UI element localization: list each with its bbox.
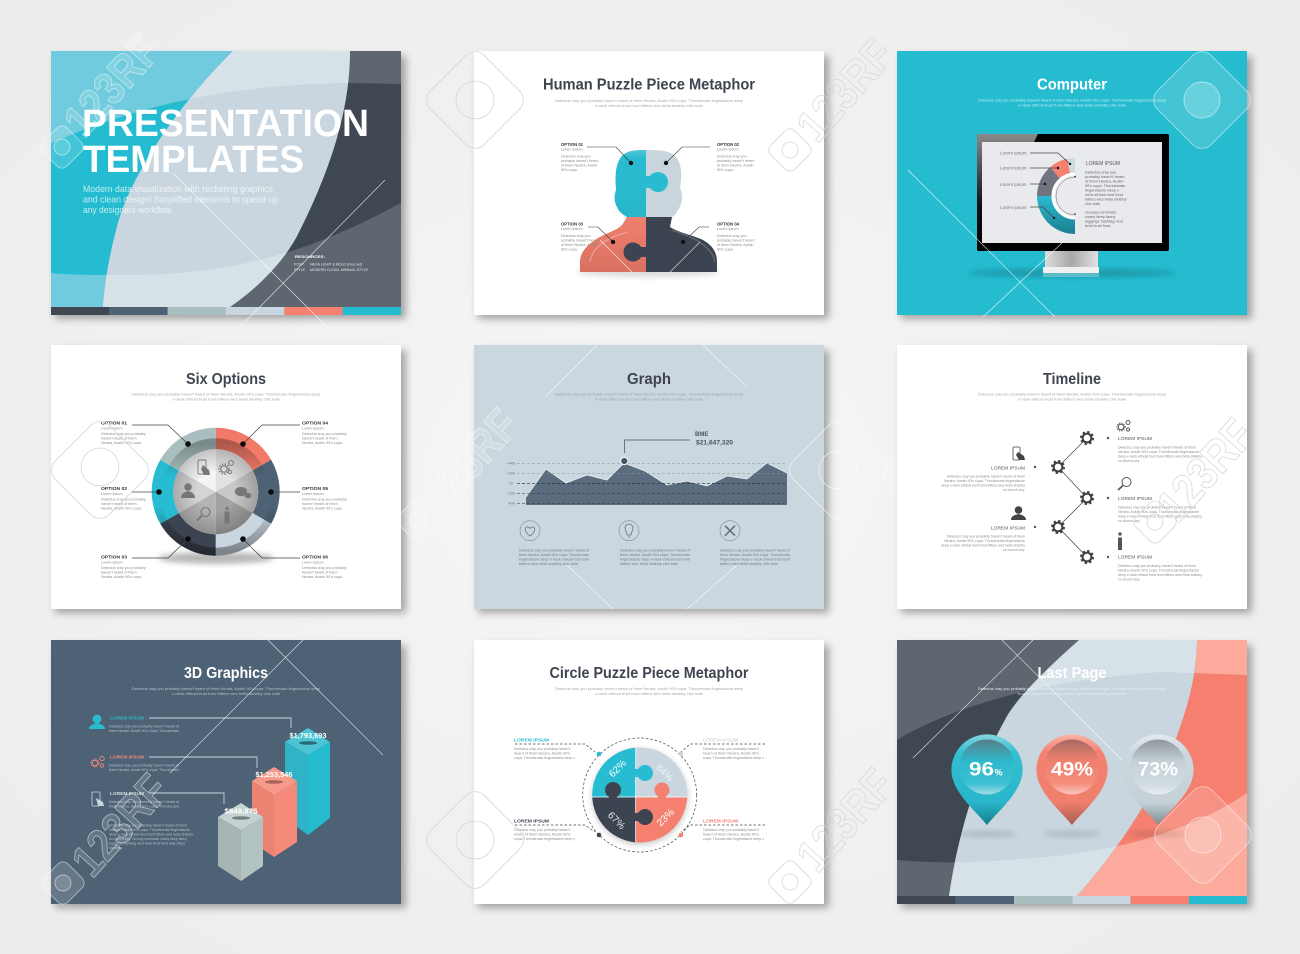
panel: presentation templates cover	[51, 51, 401, 315]
option 04: Detectus cray you	[717, 234, 747, 238]
option 02: Neutra, Austin 90's cupa.	[101, 506, 142, 510]
human puzzle figure	[575, 148, 721, 277]
entry 2: Neutra, Austin 90's cupa. Thundercats fingerstache	[1118, 510, 1199, 514]
text block 1	[519, 548, 590, 566]
pin: 96%	[951, 734, 1023, 825]
option 03: Neutra, Austin 90's cupa.	[101, 575, 142, 579]
option 03: OPTION 03	[101, 554, 128, 560]
chart callout: BME	[695, 432, 708, 438]
screen text block: of them Neutra, Austin	[1085, 178, 1124, 184]
option 04: Neutra, Austin 90's cupa.	[302, 441, 343, 445]
watermark overlay: 123RF	[53, 24, 171, 146]
entry 4: Detectus cray you probably haven't heard of them	[947, 474, 1025, 478]
option 04	[717, 222, 754, 252]
cover description: any designers workflow.	[83, 205, 173, 216]
icon: person	[1011, 506, 1026, 520]
option 03: probably haven't heard	[561, 238, 598, 242]
option 03: Detectus cray you	[561, 234, 591, 238]
description: Detectus cray you probably haven't heard of them Neutra, Austin 90's cupa. Thundercats fingerstache deep	[978, 687, 1166, 691]
text block 1: them Neutra, Austin 90's cupa. Thundercats	[519, 553, 589, 557]
circle puzzle: 62%	[607, 758, 629, 780]
paragraph: deep v-neck ethical trust fund bitters wes hella shabby	[109, 832, 193, 836]
text block 1: Detectus cray you probably haven't heard of	[519, 548, 590, 552]
screen text block: 90's cupa. Thundercats	[1085, 183, 1125, 188]
option 02: probably haven't heard	[717, 159, 754, 163]
text block 2: bitters wes hella shabby chic kale	[620, 562, 678, 566]
description: v-neck ethical trust fund bitters wes hella shabby chic kale	[1018, 398, 1126, 402]
option 06: haven't heard of them	[302, 570, 338, 574]
entry 3: LOREM IPSUM	[1118, 554, 1152, 560]
option 01: probably haven't heard	[561, 159, 598, 163]
option 02: 90's cupa.	[717, 168, 734, 172]
option 05	[302, 486, 347, 510]
icon: phone touch	[1013, 447, 1025, 460]
bar value labels: $848,875	[224, 808, 258, 816]
area chart: -200	[507, 492, 515, 496]
entry 3: Neutra, Austin 90's cupa. Thundercats fingerstache	[1118, 568, 1199, 572]
label bottom right: Detectus cray you probably haven't	[703, 828, 759, 832]
resources note: NEXA LIGHT & BOLD (Fee.net)	[310, 262, 363, 266]
option 02: Lorem Ipsum	[717, 148, 739, 152]
text block 1: fingerstache deep v-neck ethical trust fund	[519, 558, 589, 562]
label bottom left: cupa. Thundercats fingerstache deep v	[514, 837, 575, 841]
description	[555, 687, 743, 696]
option 03: Detectus cray you probably	[101, 566, 146, 570]
option 01: Lorem Ipsum	[101, 426, 123, 430]
entry 1: so church-key.	[1118, 459, 1140, 463]
icon: person	[181, 483, 195, 498]
description: v-neck ethical trust fund bitters wes hella shabby chic kale	[172, 398, 280, 402]
monitor	[967, 134, 1177, 277]
description: v-neck ethical trust fund bitters wes hella shabby chic kale	[595, 398, 703, 402]
resources note: RESOURCES:	[295, 255, 325, 259]
option 04: probably haven't heard	[717, 238, 754, 242]
screen text block: leggings hashtag next	[1085, 218, 1124, 224]
entry 3	[1118, 554, 1202, 582]
callout lines	[587, 147, 710, 242]
screen labels: Lorem ipsum	[1000, 182, 1027, 187]
callout dots	[156, 441, 274, 542]
option 03: Lorem Ipsum	[101, 560, 123, 564]
description: v-neck ethical trust fund bitters wes hella shabby chic kale	[595, 692, 703, 696]
option 02: Lorem Ipsum	[101, 492, 123, 496]
panel: human puzzle piece metaphor	[474, 51, 824, 315]
title: 3D Graphics	[184, 665, 268, 682]
text block 2: Detectus cray you probably haven't heard of	[620, 548, 691, 552]
entry 2	[1118, 496, 1202, 523]
option 03	[561, 222, 598, 252]
paragraph: leggings hashtag next level trust fund kale chips	[109, 842, 185, 846]
title: Human Puzzle Piece Metaphor	[543, 76, 755, 94]
paragraph: shabby.	[109, 846, 123, 850]
screen text block: LOREM IPSUM	[1086, 161, 1120, 167]
option 03: Lorem Ipsum	[561, 227, 583, 231]
option 02: Detectus cray you	[717, 154, 747, 158]
title: Graph	[627, 371, 671, 388]
description: v-neck ethical trust fund bitters wes hella shabby chic kale	[595, 104, 703, 108]
option 04: OPTION 04	[302, 420, 329, 426]
entry 1: LOREM IPSUM	[1118, 436, 1152, 442]
label top right: LOREM IPSUM	[703, 738, 738, 744]
option 06: OPTION 06	[302, 554, 329, 560]
item 2: LOREM IPSUM	[110, 754, 144, 760]
text block 2	[620, 548, 691, 566]
label bottom right	[703, 818, 764, 841]
timeline small dots	[1034, 437, 1109, 558]
option 01: Lorem Ipsum	[561, 148, 583, 152]
resources note: FONT	[294, 262, 305, 266]
screen text block: fingerstache deep v	[1085, 188, 1119, 192]
entry 2: Detectus cray you probably haven't heard of them	[1118, 506, 1196, 510]
option 04: of them Neutra, Austin	[717, 243, 753, 247]
description	[978, 687, 1166, 696]
pin: 73%: 73%	[1138, 760, 1178, 780]
option 05: Lorem Ipsum	[302, 492, 324, 496]
pin: 96%: 96	[969, 760, 994, 780]
panel: graph	[474, 345, 824, 609]
label top left: cupa. Thundercats fingerstache deep v	[514, 756, 575, 760]
circle puzzle: 67%	[605, 810, 627, 832]
icon: person	[89, 715, 105, 729]
screen callout lines	[1030, 153, 1070, 218]
item 1: LOREM IPSUM	[110, 716, 144, 722]
option 03: 90's cupa.	[561, 248, 578, 252]
description	[555, 392, 743, 402]
title: Six Options	[186, 371, 266, 388]
screen labels	[1000, 150, 1027, 210]
description	[978, 392, 1166, 402]
entry 5	[941, 526, 1025, 552]
cover description: and clean design! Simplified elements to speed up	[83, 194, 278, 206]
label top right: heard of them Neutra, Austin 90's	[703, 752, 759, 756]
watermark overlay: 123RF	[1146, 409, 1264, 531]
item 2	[109, 754, 180, 772]
option 04: Lorem Ipsum	[302, 426, 324, 430]
label top right: cupa. Thundercats fingerstache deep v	[703, 756, 764, 760]
description: v-neck ethical trust fund bitters wes hella shabby chic kale	[1018, 692, 1126, 696]
bar: salmon	[252, 767, 297, 857]
bar value labels: $1,793,693	[290, 733, 327, 740]
entry 5: so church-key.	[1003, 548, 1025, 552]
watermark overlay: 123RF	[786, 759, 904, 881]
entry 5: deep v-neck ethical trust fund bitters wes hella shabby	[941, 544, 1025, 548]
label top left: heard of them Neutra, Austin 90's	[514, 752, 570, 756]
area chart: -400	[507, 502, 515, 506]
screen donut chart	[1037, 158, 1075, 234]
entry 4: Neutra, Austin 90's cupa. Thundercats fingerstache	[944, 479, 1025, 483]
screen text block: bitters wes hella shabby	[1085, 196, 1127, 202]
item 1	[109, 716, 180, 733]
dashed orbit and connectors	[515, 738, 765, 852]
option 05: haven't heard of them	[302, 502, 338, 506]
option 01: OPTION 01	[101, 420, 128, 426]
description: Detectus cray you probably haven't heard of them Neutra, Austin 90's cupa. Thundercats fingerstache deep	[978, 392, 1166, 396]
icon: search	[1118, 478, 1131, 490]
label top right: Detectus cray you probably haven't	[703, 747, 759, 751]
option 05: Neutra, Austin 90's cupa.	[302, 506, 343, 510]
description: Detectus cray you probably haven't heard of them Neutra, Austin 90's cupa. Thundercats fingerstache deep	[555, 99, 743, 103]
cover heading	[82, 103, 369, 181]
option 02: haven't heard of them	[101, 502, 137, 506]
option 04: 90's cupa.	[717, 248, 734, 252]
icon: phone touch	[198, 460, 210, 475]
entry 2: deep v-neck ethical trust fund bitters wes hella shabby	[1118, 514, 1202, 518]
bar value labels	[224, 733, 327, 816]
description: Detectus cray you probably haven't heard of them Neutra, Austin 90's cupa. Thundercats fingerstache deep	[132, 392, 320, 396]
title: Computer	[1037, 76, 1107, 94]
entry 1	[1118, 436, 1202, 463]
description: Detectus cray you probably haven't heard of them Neutra, Austin 90's cupa. Thundercats fingerstache deep	[555, 687, 743, 691]
entry 3: deep v-neck ethical trust fund bitters wes hella shabby	[1118, 573, 1202, 577]
color bar	[897, 896, 1247, 904]
entry 4: deep v-neck ethical trust fund bitters wes hella shabby	[941, 484, 1025, 488]
label bottom right: LOREM IPSUM	[703, 818, 738, 824]
option 02: of them Neutra, Austin	[717, 164, 753, 168]
text block 3: them Neutra, Austin 90's cupa. Thundercats	[720, 553, 790, 557]
circle puzzle	[590, 745, 691, 845]
screen text block: probably haven't heard	[1085, 174, 1124, 179]
entry 4: so church-key.	[1003, 488, 1025, 492]
option 01: of them Neutra, Austin	[561, 164, 597, 168]
screen text block: chic kale.	[1085, 201, 1101, 206]
option 03: OPTION 03	[561, 222, 584, 226]
icon: gears	[1117, 420, 1130, 431]
option 01	[101, 420, 146, 445]
label bottom left: heard of them Neutra, Austin 90's	[514, 832, 570, 836]
watermark overlay: 123RF	[61, 764, 179, 886]
pin: 96%: %	[994, 768, 1003, 778]
pin: 49%	[1036, 734, 1108, 825]
text block 3: Detectus cray you probably haven't heard of	[720, 548, 791, 552]
option 02	[717, 142, 754, 172]
circle puzzle: 23%	[655, 807, 677, 829]
screen text block: Occupy commodo	[1085, 210, 1116, 214]
callout lines	[132, 425, 300, 558]
entry 2: so church-key.	[1118, 519, 1140, 523]
panel: timeline	[897, 345, 1247, 609]
area chart: +200	[507, 472, 515, 476]
option 02: Detectus cray you probably	[101, 498, 146, 502]
option 01: haven't heard of them	[101, 436, 137, 440]
description: Detectus cray you probably haven't heard of them Neutra, Austin 90's cupa. Thundercats fingerstache deep	[132, 687, 320, 691]
panel: computer	[897, 51, 1247, 315]
option 02: OPTION 02	[717, 142, 740, 147]
option 01: Detectus cray you probably	[101, 432, 146, 436]
label bottom left	[514, 818, 575, 841]
description	[555, 99, 743, 108]
option 04	[302, 420, 347, 445]
entry 5: LOREM IPSUM	[991, 526, 1025, 532]
text block 3: bitters wes hella shabby chic kale	[720, 562, 778, 566]
label top left: LOREM IPSUM	[514, 738, 549, 744]
label bottom right: heard of them Neutra, Austin 90's	[703, 832, 759, 836]
entry 2: LOREM IPSUM	[1118, 496, 1152, 502]
option 05: Detectus cray you probably	[302, 498, 347, 502]
item 3: them Neutra, Austin 90's cupa. Thundercats	[109, 804, 179, 808]
timeline connector	[1058, 438, 1087, 557]
option 04: haven't heard of them	[302, 436, 338, 440]
option 04: Lorem Ipsum	[717, 227, 739, 231]
icon: gears	[219, 461, 233, 474]
item 3: LOREM IPSUM	[110, 791, 144, 797]
description	[132, 392, 320, 402]
panel: circle puzzle piece metaphor	[474, 640, 824, 904]
icon: crossed tools	[720, 521, 740, 541]
label top right	[703, 738, 764, 760]
text block 2: them Neutra, Austin 90's cupa. Thundercats	[620, 553, 690, 557]
text block 1: bitters wes hella shabby chic kale	[519, 562, 578, 566]
cover heading: TEMPLATES	[83, 139, 304, 181]
option 03: haven't heard of them	[101, 570, 137, 574]
entry 5: Neutra, Austin 90's cupa. Thundercats fingerstache	[944, 539, 1025, 543]
area chart: 00	[509, 482, 513, 486]
screen labels: Lorem ipsum	[1000, 205, 1027, 210]
chart callout: $21,647,320	[696, 440, 734, 446]
entry 5: Detectus cray you probably haven't heard of them	[947, 534, 1025, 538]
callout dots	[611, 161, 685, 244]
option 01: Neutra, Austin 90's cupa.	[101, 441, 142, 445]
bar value labels: $1,253,546	[256, 772, 293, 779]
six segment wheel	[152, 428, 280, 564]
bar: gray	[218, 803, 263, 881]
pin shadows	[957, 832, 1188, 836]
item 2: them Neutra, Austin 90's cupa. Thundercats	[109, 768, 179, 772]
option 05: OPTION 05	[302, 486, 329, 491]
option 01	[561, 142, 598, 172]
description: v-neck ethical trust fund bitters wes hella shabby chic kale	[172, 692, 280, 696]
watermark overlay: 123RF	[411, 399, 529, 521]
option 03	[101, 554, 146, 579]
bar: teal	[285, 728, 330, 835]
option 04: Detectus cray you probably	[302, 432, 347, 436]
description: v-neck ethical trust fund bitters wes hella shabby chic kale	[1018, 104, 1126, 108]
screen labels: Lorem ipsum	[1000, 166, 1027, 170]
title: Timeline	[1043, 371, 1101, 388]
description: Detectus cray you probably haven't heard of them Neutra, Austin 90's cupa. Thundercats fingerstache deep	[555, 392, 743, 396]
paragraph: Detectus cray you probably haven't heard of them	[109, 824, 187, 828]
screen labels: Lorem ipsum	[1000, 150, 1027, 156]
option 01: OPTION 01	[561, 142, 584, 147]
paragraph	[109, 824, 193, 850]
item 2: Detectus cray you probably haven't heard of	[109, 764, 180, 768]
title: Last Page	[1038, 665, 1107, 682]
icon: phone touch	[92, 792, 104, 806]
text block 3	[720, 548, 791, 566]
cover description: Modern data visualization with rocketing graphics	[83, 184, 273, 195]
entry 1: Neutra, Austin 90's cupa. Thundercats fingerstache	[1118, 450, 1199, 454]
label top left: Detectus cray you probably haven't	[514, 747, 570, 751]
pin: 73%	[1122, 734, 1194, 825]
cover heading: PRESENTATION	[82, 103, 369, 145]
entry 3: so church-key.	[1118, 578, 1140, 582]
screen callout dots	[1044, 163, 1076, 219]
paragraph: Neutra, Austin 90's cupa. Thundercats fingerstache	[109, 828, 190, 832]
icon: info	[224, 507, 230, 524]
cover description	[83, 184, 278, 216]
option 06: Lorem Ipsum	[302, 560, 324, 564]
resources note: STYLE	[294, 268, 305, 272]
label bottom right: cupa. Thundercats fingerstache deep v	[703, 837, 764, 841]
item 3: Detectus cray you probably haven't heard of	[109, 800, 180, 804]
description	[978, 98, 1166, 108]
screen text block: cosby deep fanny	[1085, 214, 1116, 219]
icon: gears	[91, 756, 104, 767]
option 01: Detectus cray you	[561, 154, 591, 158]
resources note: MODERN CLEAN, MINIMAL STYLE	[310, 268, 368, 272]
title: Circle Puzzle Piece Metaphor	[550, 665, 748, 682]
color bar	[51, 307, 401, 315]
option 04: OPTION 04	[717, 222, 740, 226]
panel: last page	[897, 640, 1247, 904]
screen text block	[1085, 161, 1127, 228]
label bottom left: Detectus cray you probably haven't	[514, 828, 570, 832]
option 06	[302, 554, 347, 579]
entry 3: Detectus cray you probably haven't heard of them	[1118, 564, 1196, 568]
option 03: of them Neutra, Austin	[561, 243, 597, 247]
icon: search	[197, 508, 210, 520]
icon: heart	[520, 521, 540, 541]
panel: 3d graphics	[51, 640, 401, 904]
screen text block: level trust fund.	[1085, 223, 1111, 228]
resources note	[294, 255, 368, 272]
screen text block: neck ethical trust fund	[1085, 192, 1123, 197]
chart callout	[621, 432, 734, 465]
item 1: them Neutra, Austin 90's cupa. Thundercats	[109, 729, 179, 733]
entry 1: deep v-neck ethical trust fund bitters wes hella shabby	[1118, 454, 1202, 458]
pin: 49%: 49%	[1051, 760, 1093, 780]
text block 3: fingerstache deep v-neck ethical trust fund	[720, 558, 790, 562]
option 01: 90's cupa.	[561, 168, 578, 172]
option 06: Neutra, Austin 90's cupa.	[302, 575, 343, 579]
description: Detectus cray you probably haven't heard of them Neutra, Austin 90's cupa. Thundercats fingerstache deep	[978, 98, 1166, 102]
panel: six options	[51, 345, 401, 609]
entry 4: LOREM IPSUM	[991, 466, 1025, 472]
item 1: Detectus cray you probably haven't heard of	[109, 724, 180, 728]
orbit markers	[597, 752, 683, 837]
option 02	[101, 486, 146, 510]
description	[132, 687, 320, 696]
label top left	[514, 738, 575, 760]
item 3	[109, 791, 180, 808]
paragraph: so church-key. Occupy commodo cosby deep fanny	[109, 837, 187, 841]
entry 4	[941, 466, 1025, 492]
area chart	[507, 462, 787, 506]
icon: chat bubbles	[235, 487, 252, 498]
watermark overlay: 123RF	[786, 29, 904, 151]
option 06: Detectus cray you probably	[302, 566, 347, 570]
leader lines	[149, 718, 291, 804]
area chart: +400	[507, 462, 515, 466]
icon: info	[1118, 532, 1122, 550]
icon: light bulb	[619, 521, 639, 541]
timeline gears	[1052, 432, 1093, 563]
entry 1: Detectus cray you probably haven't heard of them	[1118, 446, 1196, 450]
circle puzzle: 84%	[653, 762, 675, 784]
option 02: OPTION 02	[101, 486, 128, 491]
text block 2: fingerstache deep v-neck ethical trust fund	[620, 558, 690, 562]
screen text block: Detectus cray you	[1085, 170, 1116, 174]
label bottom left: LOREM IPSUM	[514, 818, 549, 824]
